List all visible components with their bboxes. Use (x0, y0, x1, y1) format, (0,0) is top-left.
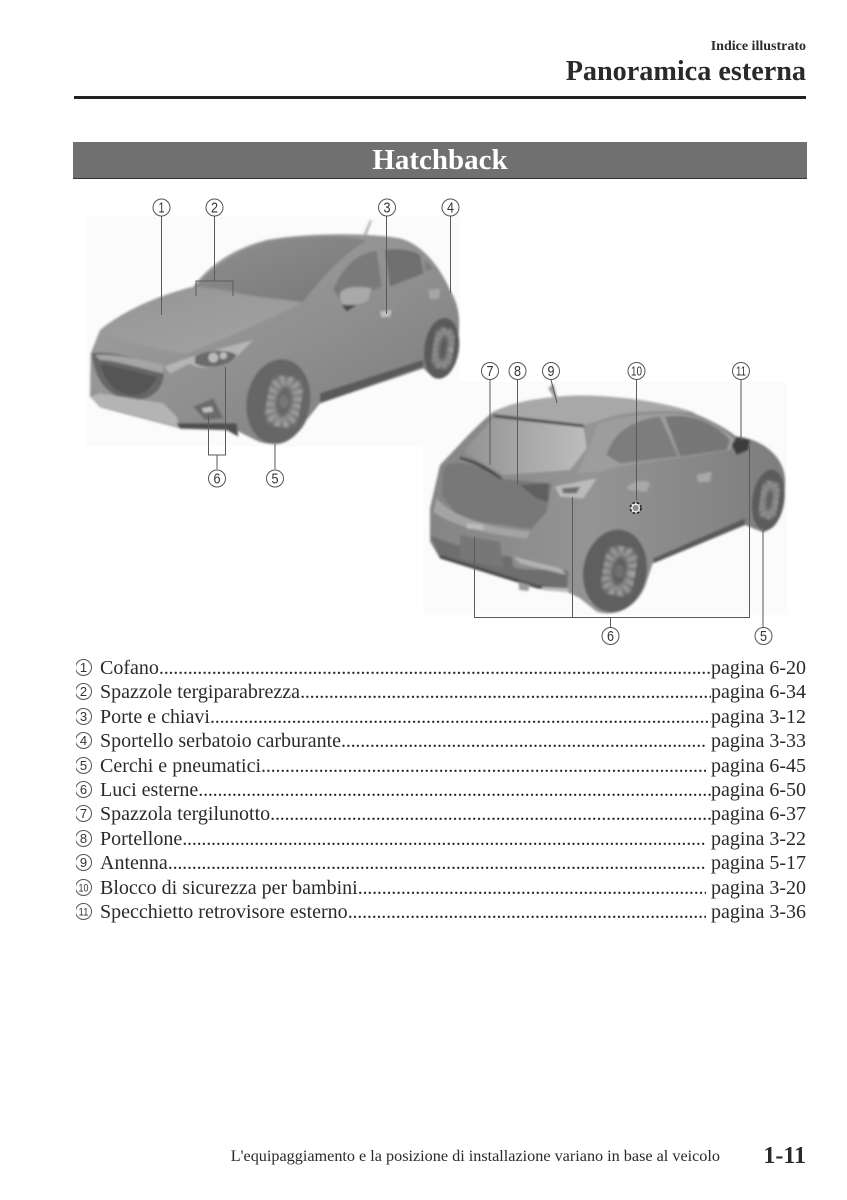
list item 9: pagina 5-17 (711, 852, 806, 874)
list item 6: pagina 6-50 (711, 779, 806, 801)
list item 10: 10 (78, 882, 88, 894)
page number: 1-11 (763, 1143, 806, 1169)
callout leaders: front view (162, 216, 763, 627)
callout numbers on the illustrations: 10 (631, 364, 642, 378)
list item 5: Cerchi e pneumatici (100, 755, 261, 777)
list item 1: pagina 6-20 (711, 657, 806, 679)
callout numbers on the illustrations: 6 (607, 628, 614, 645)
callout numbers on the illustrations: 2 (211, 200, 218, 216)
list item 8: 8 (80, 831, 87, 846)
footer note: L'equipaggiamento e la posizione di installazione variano in base al veicolo (231, 1147, 720, 1165)
list item 4: Sportello serbatoio carburante (100, 730, 341, 752)
list item 9: Antenna (100, 852, 168, 874)
section label: Indice illustrato: Indice illustrato (711, 39, 806, 54)
list item 4: pagina 3-33 (711, 730, 806, 752)
list item 3: Porte e chiavi (100, 706, 210, 728)
photo: front three-quarter view (87, 217, 463, 449)
callout numbers on the illustrations: 4 (447, 200, 454, 216)
list item 2 (76, 681, 806, 703)
list item 5: 5 (80, 758, 87, 773)
list item 10: Blocco di sicurezza per bambini (100, 877, 358, 899)
parts list (76, 657, 806, 923)
list item 11: 11 (78, 906, 88, 918)
list item 8: Portellone (100, 828, 182, 850)
callout numbers on the illustrations: 9 (548, 363, 554, 380)
callout numbers on the illustrations: 3 (384, 200, 390, 216)
list item 9: 9 (80, 855, 87, 870)
list item 3: pagina 3-12 (711, 706, 806, 728)
list item 2: Spazzole tergiparabrezza (100, 681, 300, 703)
list item 5 (76, 755, 806, 777)
list item 3 (76, 706, 806, 728)
list item 5: pagina 6-45 (711, 755, 806, 777)
list item 3: 3 (80, 709, 87, 724)
photo: rear three-quarter view (423, 382, 788, 618)
list item 8: pagina 3-22 (711, 828, 806, 850)
list item 2: pagina 6-34 (711, 681, 806, 703)
list item 6: 6 (80, 782, 87, 797)
callout numbers on the illustrations: 5 (272, 470, 278, 488)
callout numbers on the illustrations (153, 199, 772, 645)
page title: Panoramica esterna: Panoramica esterna (566, 56, 806, 87)
list item 7: pagina 6-37 (711, 803, 806, 825)
list item 2: 2 (80, 684, 87, 699)
callout numbers on the illustrations: 7 (486, 363, 494, 380)
callout numbers on the illustrations: 11 (736, 364, 746, 378)
callout numbers on the illustrations: 5 (760, 628, 767, 645)
list item 1: 1 (80, 660, 87, 675)
list item 7: Spazzola tergilunotto (100, 803, 270, 825)
heading bar: Hatchback: Hatchback (372, 144, 508, 176)
list item 10: pagina 3-20 (711, 877, 806, 899)
list item 11: Specchietto retrovisore esterno (100, 901, 348, 923)
list item 11: pagina 3-36 (711, 901, 806, 923)
list item 1: Cofano (100, 657, 159, 679)
list item 11 (76, 901, 806, 923)
heading bar: Hatchback (73, 142, 807, 179)
callout numbers on the illustrations: 1 (158, 200, 164, 216)
list item 7: 7 (80, 806, 87, 821)
list item 4: 4 (80, 733, 87, 748)
list item 4 (76, 730, 806, 752)
list item 10 (76, 877, 806, 899)
list item 7 (76, 803, 806, 825)
callout numbers on the illustrations: 8 (514, 363, 521, 380)
callout numbers on the illustrations: 6 (214, 470, 220, 488)
list item 6: Luci esterne (100, 779, 198, 801)
